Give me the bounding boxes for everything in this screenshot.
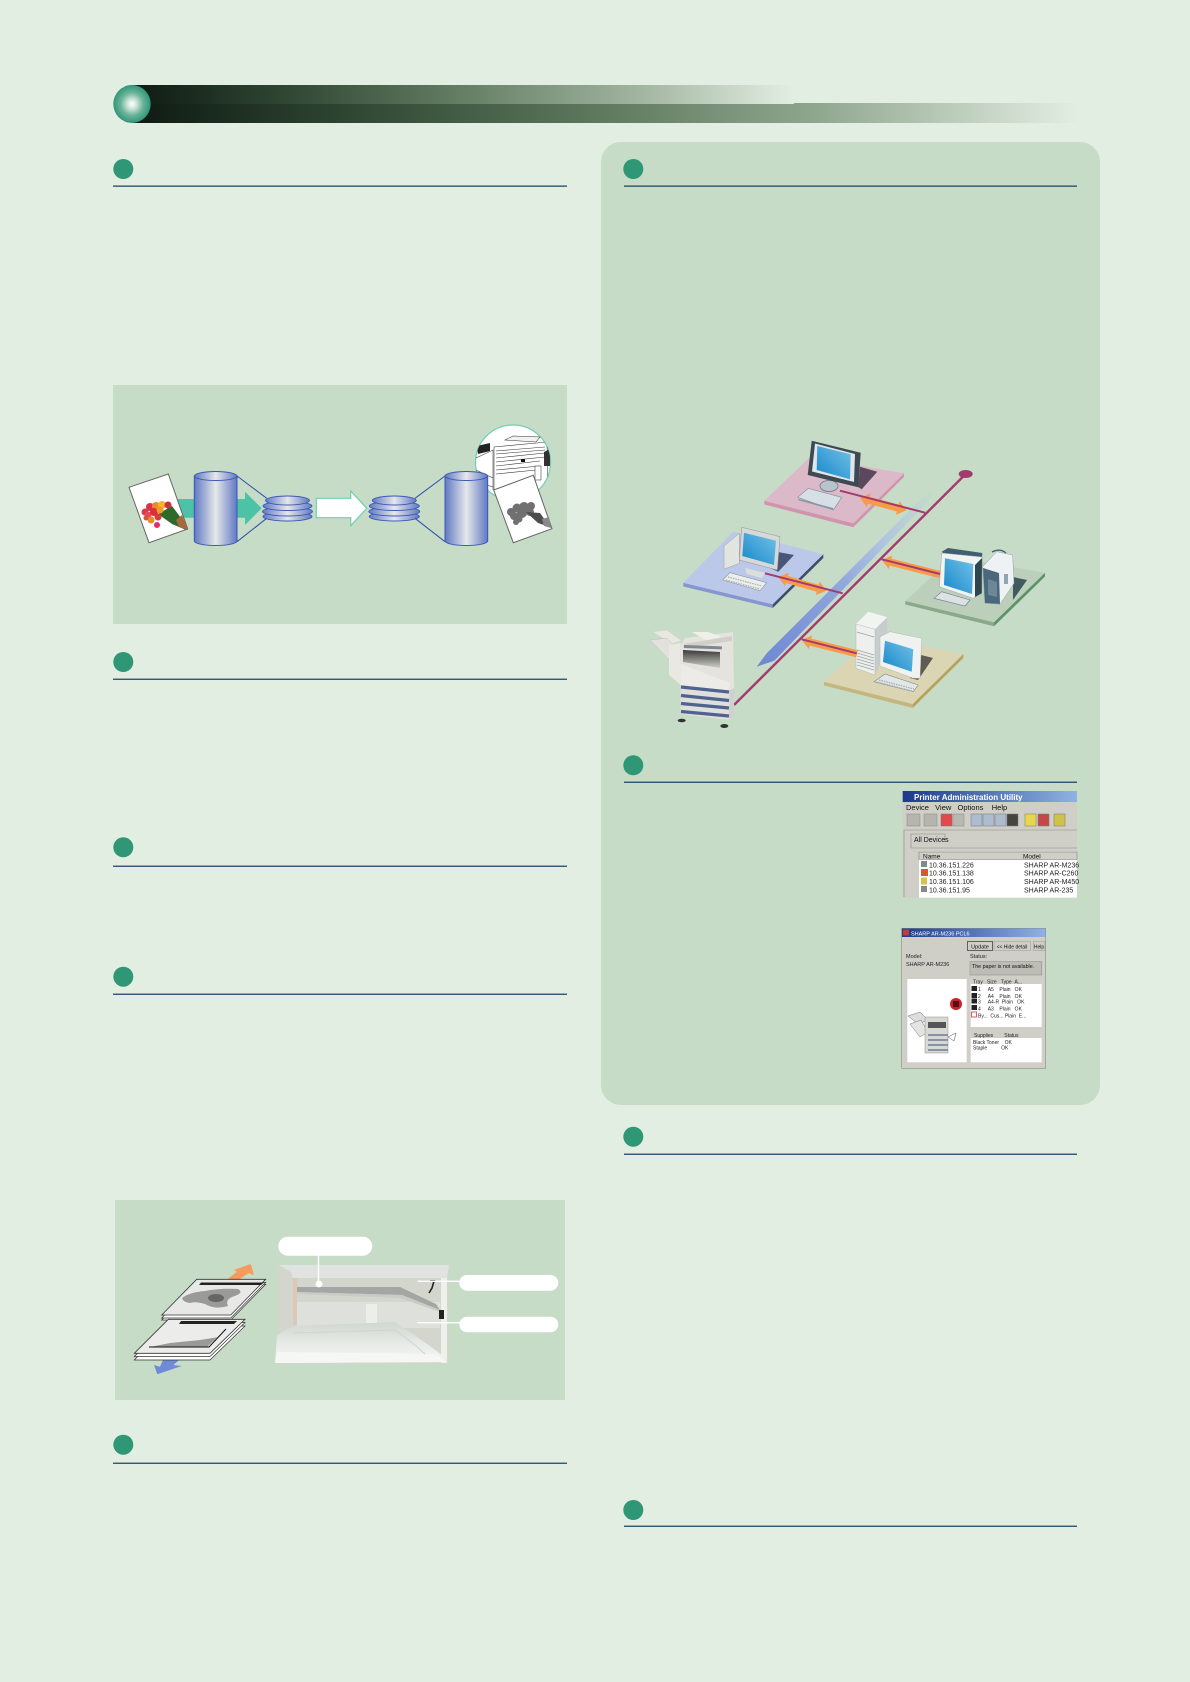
device table: 10.36.151.226 [929,862,974,869]
icon: multifunction printer [650,630,734,728]
arrow: teal input [177,492,262,525]
model label: Model: [906,954,923,960]
device table [919,852,1079,898]
tray table: 4 A3 Plain OK [978,1006,1023,1012]
status buttons: Update [971,944,989,950]
tray table: 3 A4-R Plain OK [978,1000,1025,1006]
supplies table [971,1031,1042,1062]
expansion lines right [415,476,445,542]
window menu: Device View Options Help [906,803,1007,812]
platform: pink [764,457,904,527]
section heading 1 [113,159,567,187]
supplies table: Staple OK [973,1046,1009,1052]
device table: SHARP AR-M236 [1024,862,1079,869]
platform: green [905,557,1045,626]
computer: green desk [934,548,1027,606]
device table: SHARP AR-M450 [1024,879,1079,886]
device table: 10.36.151.95 [929,887,970,894]
icon: upper paper stack [162,1279,266,1320]
device table: SHARP AR-235 [1024,887,1073,894]
supplies table: Supplies Status [974,1033,1019,1039]
status message: Status: [970,954,988,960]
status buttons: << Hide detail [997,944,1027,950]
computer: tan desk [856,612,933,692]
device tab [904,830,1077,897]
arrow: tan desk link [800,633,859,661]
device table: 10.36.151.106 [929,879,974,886]
tray table: Tray Size Type A... [973,980,1022,986]
arrow: blue desk link [765,570,843,598]
callout: top label [278,1237,372,1287]
section heading right 2 [623,755,1077,783]
computer: pink desk [798,441,877,510]
arrow: pink desk link [840,491,925,517]
section heading right 4 [623,1500,1077,1527]
status message [970,954,1042,975]
computer: blue desk [723,527,794,591]
tray table: 1 A5 Plain OK [978,987,1023,993]
page artwork [113,85,1100,1527]
network diagram [650,441,1045,728]
icon: left disk stack [262,496,312,521]
status buttons: Help [1034,944,1044,950]
arrow: orange output [228,1264,254,1279]
status title bar [902,928,1046,938]
device tab: All Devices [914,837,949,844]
section heading right 1 [623,159,1077,187]
platform: blue [683,532,823,608]
printer status image [907,979,967,1062]
expansion lines left [237,476,267,542]
network cable [734,470,973,705]
icon: right disk stack [369,496,420,521]
window title bar [903,791,1077,802]
platform: tan [824,637,963,708]
panel: network right column [601,142,1100,1105]
photo: output trays [275,1265,449,1363]
section heading right 3 [623,1127,1077,1155]
window title bar: Printer Administration Utility [914,793,1023,802]
device table: Name [923,854,941,860]
icon: right data cylinder [445,472,488,546]
section heading 5 [113,1435,567,1464]
supplies table: Black Toner OK [973,1040,1012,1046]
callout: lower tray label [418,1317,558,1332]
status title bar: SHARP AR-M236 PCL6 [911,932,970,938]
icon: colour original page [129,474,188,543]
status message: The paper is not available. [972,964,1034,970]
tray table [971,978,1042,1027]
arrow: blue output [154,1359,182,1374]
icon: printer line drawing in circle [476,425,550,500]
status buttons [968,942,1045,950]
section heading 4 [113,967,567,995]
arrow: green desk link [880,553,942,581]
device table: SHARP AR-C260 [1024,871,1078,878]
section heading 3 [113,837,567,867]
icon: greyscale output page [494,475,552,543]
callout: upper tray label [418,1275,558,1291]
panel: compression diagram [113,385,567,624]
panel: duplex output diagram [115,1200,565,1400]
device table: 10.36.151.138 [929,871,974,878]
utility window: printer list [903,791,1079,898]
tray table: 2 A4 Plain OK [978,994,1023,1000]
model label: SHARP AR-M236 [906,962,949,968]
header bar [113,85,1079,123]
device table: Model [1023,854,1041,860]
tray table: By... Cus... Plain E... [978,1014,1026,1020]
icon: left data cylinder [194,472,237,546]
window toolbar [907,814,1065,826]
arrow: white transfer [316,491,367,526]
section heading 2 [113,652,567,680]
arrow: data flow [757,489,936,667]
utility window: device status [902,928,1046,1068]
icon: lower paper stack [134,1319,245,1360]
